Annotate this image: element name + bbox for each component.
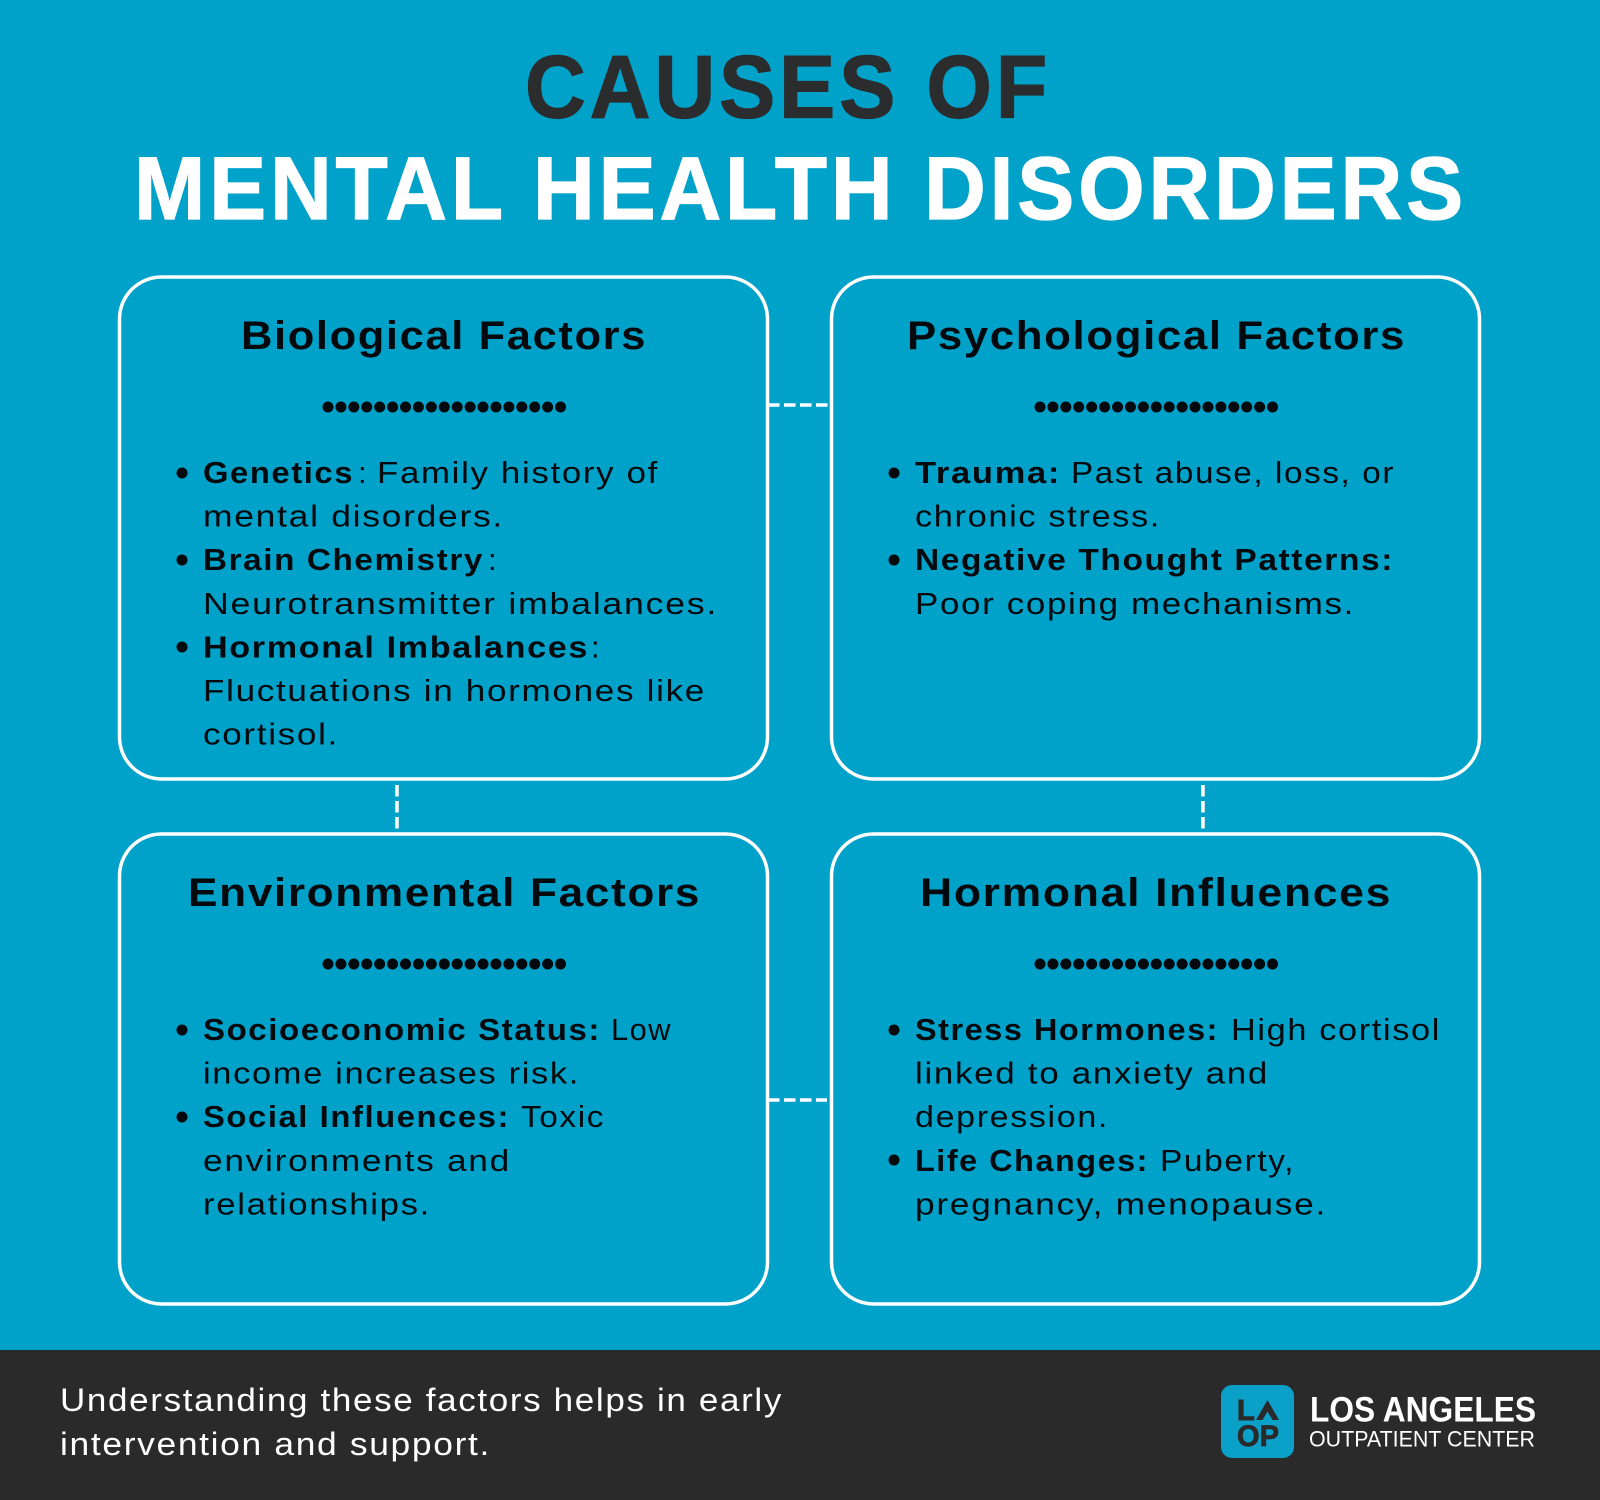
bullet list: hormonal influences bbox=[888, 1012, 1441, 1221]
bullet list: biological factors: Genetics bbox=[203, 455, 354, 490]
bullet list: environmental factors: Social Influences: bbox=[203, 1099, 510, 1134]
bullet list: biological factors: : bbox=[488, 542, 498, 577]
bullet list: biological factors: Family history of bbox=[377, 455, 659, 490]
bullet list: environmental factors: relationships. bbox=[203, 1186, 431, 1221]
bullet list: biological factors: mental disorders. bbox=[203, 499, 504, 534]
heading: hormonal influences: Hormonal Influences bbox=[920, 871, 1392, 915]
bullet list: environmental factors: environments and bbox=[203, 1143, 511, 1178]
bullet list: hormonal influences: depression. bbox=[915, 1099, 1109, 1134]
bullet list: psychological factors: Trauma: bbox=[915, 455, 1061, 490]
bullet list: biological factors: Hormonal Imbalances bbox=[203, 629, 589, 664]
heading: biological factors: Biological Factors bbox=[241, 314, 647, 358]
panel: psychological factors bbox=[832, 277, 1480, 779]
panel: hormonal influences bbox=[832, 834, 1480, 1304]
divider dots bbox=[1040, 958, 1273, 970]
bullet list: hormonal influences: Life Changes: bbox=[915, 1143, 1149, 1178]
footer text bbox=[60, 1382, 783, 1462]
bullet list: psychological factors: Past abuse, loss, or bbox=[1071, 455, 1395, 490]
divider dots bbox=[1040, 402, 1273, 412]
footer text: intervention and support. bbox=[60, 1426, 491, 1462]
bullet list: environmental factors: Socioeconomic Status: bbox=[203, 1012, 601, 1047]
icon: logo badge bbox=[1221, 1385, 1294, 1458]
footer bar bbox=[0, 1350, 1600, 1500]
bullet list: biological factors: : bbox=[358, 455, 368, 490]
bullet list: psychological factors: Negative Thought Patterns: bbox=[915, 542, 1394, 577]
heading: environmental factors: Environmental Factors bbox=[188, 871, 701, 915]
bullet list: psychological factors: chronic stress. bbox=[915, 499, 1161, 534]
bullet list: biological factors: Neurotransmitter imbalances. bbox=[203, 586, 718, 621]
icon: logo badge: OP bbox=[1237, 1420, 1279, 1453]
bullet list: environmental factors: Low bbox=[611, 1012, 672, 1047]
bullet list: hormonal influences: linked to anxiety and bbox=[915, 1056, 1269, 1091]
title bbox=[134, 37, 1467, 238]
title: CAUSES OF bbox=[525, 37, 1051, 137]
divider dots bbox=[328, 402, 561, 412]
bullet list: hormonal influences: Stress Hormones: bbox=[915, 1012, 1219, 1047]
connectors between panels bbox=[397, 405, 1203, 1100]
bullet list: biological factors: cortisol. bbox=[203, 717, 339, 752]
footer text: Understanding these factors helps in early bbox=[60, 1382, 783, 1418]
panel: environmental factors bbox=[120, 834, 768, 1304]
bullet list: psychological factors: Poor coping mechanisms. bbox=[915, 586, 1355, 621]
bullet list: hormonal influences: pregnancy, menopause. bbox=[915, 1186, 1327, 1221]
bullet list: hormonal influences: High cortisol bbox=[1231, 1012, 1441, 1047]
bullet list: biological factors: Brain Chemistry bbox=[203, 542, 484, 577]
bullet list: environmental factors: income increases risk. bbox=[203, 1056, 580, 1091]
heading: psychological factors: Psychological Factors bbox=[907, 314, 1406, 358]
logo wordmark: LOS ANGELES bbox=[1310, 1390, 1536, 1430]
logo wordmark: OUTPATIENT CENTER bbox=[1309, 1426, 1535, 1452]
bullet list: environmental factors: Toxic bbox=[521, 1099, 605, 1134]
icon: logo badge: L bbox=[1237, 1395, 1255, 1427]
divider dots bbox=[328, 958, 561, 970]
logo bbox=[1221, 1385, 1536, 1458]
bullet list: psychological factors bbox=[888, 455, 1395, 621]
bullet list: biological factors bbox=[176, 455, 718, 752]
bullet list: environmental factors bbox=[176, 1012, 672, 1221]
bullet list: hormonal influences: Puberty, bbox=[1160, 1143, 1295, 1178]
bullet list: biological factors: : bbox=[591, 629, 601, 664]
panel: biological factors bbox=[120, 277, 768, 779]
bullet list: biological factors: Fluctuations in hormones like bbox=[203, 673, 706, 708]
logo wordmark bbox=[1309, 1390, 1536, 1452]
title: MENTAL HEALTH DISORDERS bbox=[134, 138, 1467, 238]
